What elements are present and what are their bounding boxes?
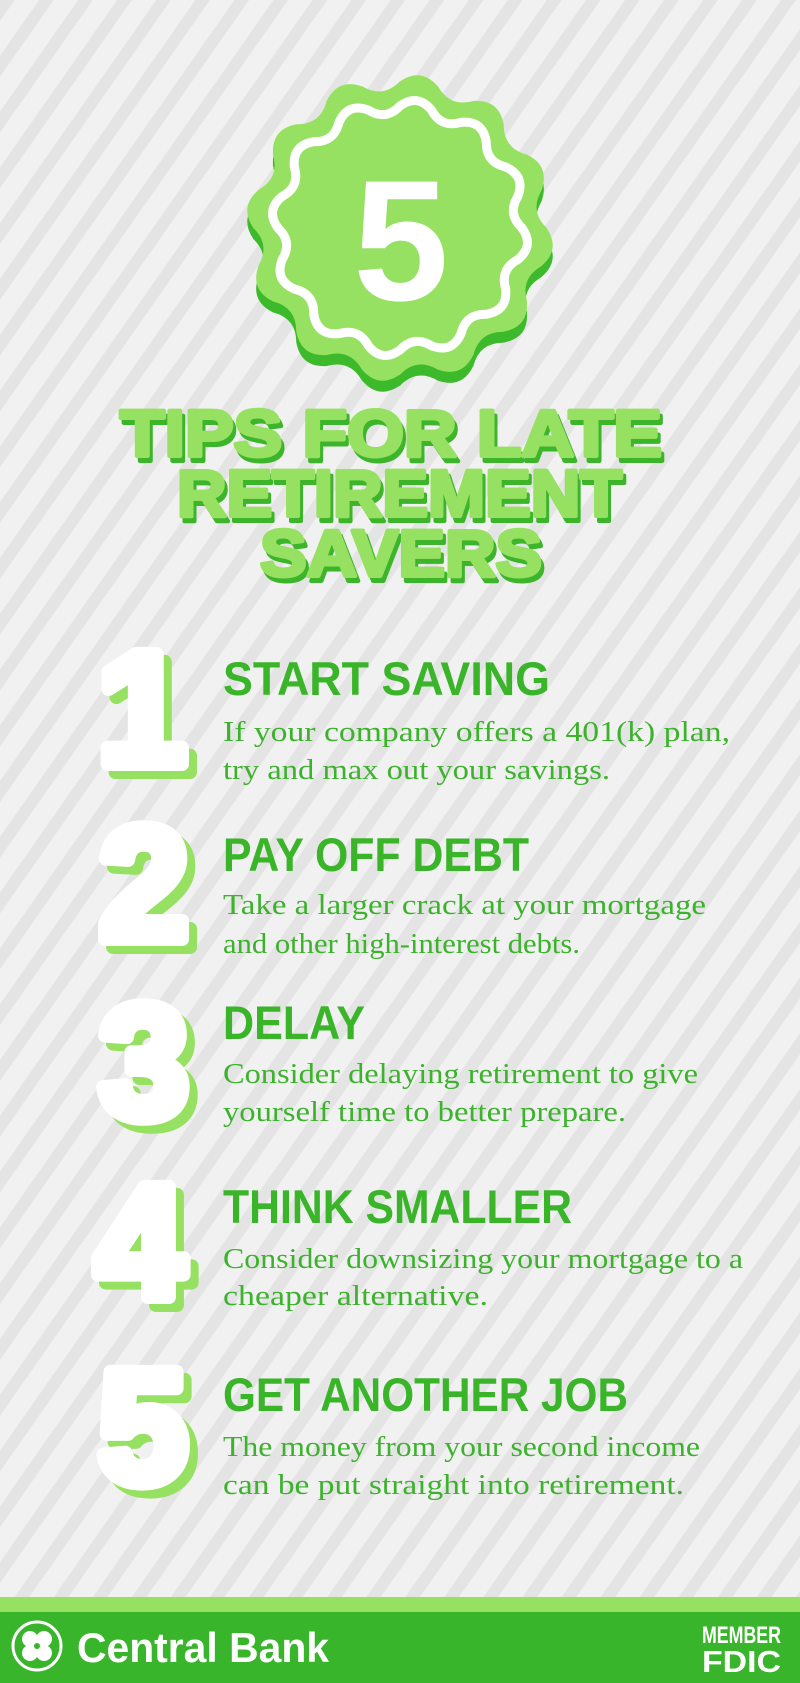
member fdic: FDIC [702, 1644, 781, 1679]
title: RETIREMENT [177, 456, 622, 530]
tip 3: delay [100, 972, 698, 1159]
tip 1: start saving: START SAVING [223, 652, 550, 705]
title: TIPS FOR LATE [120, 396, 662, 470]
number 4: 4 [96, 1152, 185, 1331]
footer [0, 1597, 800, 1683]
title: SAVERS [263, 521, 545, 595]
brand name: Central Bank [77, 1624, 330, 1671]
number 2: 2 [108, 802, 196, 981]
number 1: 1 [106, 627, 194, 806]
title: SAVERS [260, 516, 542, 590]
icon: clover logo [13, 1622, 61, 1670]
tip 2: pay off debt [100, 794, 706, 981]
tip 3: delay: DELAY [223, 996, 365, 1049]
tip 4: think smaller: THINK SMALLER [223, 1180, 572, 1233]
tip 4: think smaller: Consider downsizing your mortgage to a [223, 1244, 744, 1275]
badge: number 5: 5 [353, 145, 449, 337]
tip 3: delay: Consider delaying retirement to give [223, 1059, 698, 1090]
tip 4: think smaller [96, 1152, 744, 1339]
tip 4: think smaller: cheaper alternative. [223, 1281, 488, 1312]
tip 2: pay off debt: and other high-interest debts. [223, 929, 580, 960]
title [120, 396, 665, 595]
tip 1: start saving: If your company offers a 401(k) plan, [223, 717, 730, 748]
number 4: 4 [104, 1160, 193, 1339]
tip 1: start saving: try and max out your savings. [223, 755, 610, 786]
number 5: 5 [107, 1345, 195, 1524]
tip 2: pay off debt: Take a larger crack at your mortgage [223, 890, 706, 921]
number 3: 3 [108, 980, 196, 1159]
title: TIPS FOR LATE [123, 401, 665, 475]
number 5: 5 [99, 1337, 187, 1516]
number 1: 1 [98, 619, 186, 798]
number 3: 3 [100, 972, 188, 1151]
tip 5: get another job: GET ANOTHER JOB [223, 1368, 628, 1421]
tip 5: get another job: The money from your second income [223, 1432, 700, 1463]
tip 5: get another job: can be put straight into retirement. [223, 1470, 684, 1501]
tip 3: delay: yourself time to better prepare. [223, 1097, 626, 1128]
member fdic [702, 1622, 781, 1679]
number 2: 2 [100, 794, 188, 973]
tip 1: start saving [98, 619, 730, 806]
title: RETIREMENT [180, 461, 625, 535]
tip 5: get another job [99, 1337, 700, 1524]
tip 2: pay off debt: PAY OFF DEBT [223, 828, 529, 881]
badge: number 5 [232, 60, 568, 407]
